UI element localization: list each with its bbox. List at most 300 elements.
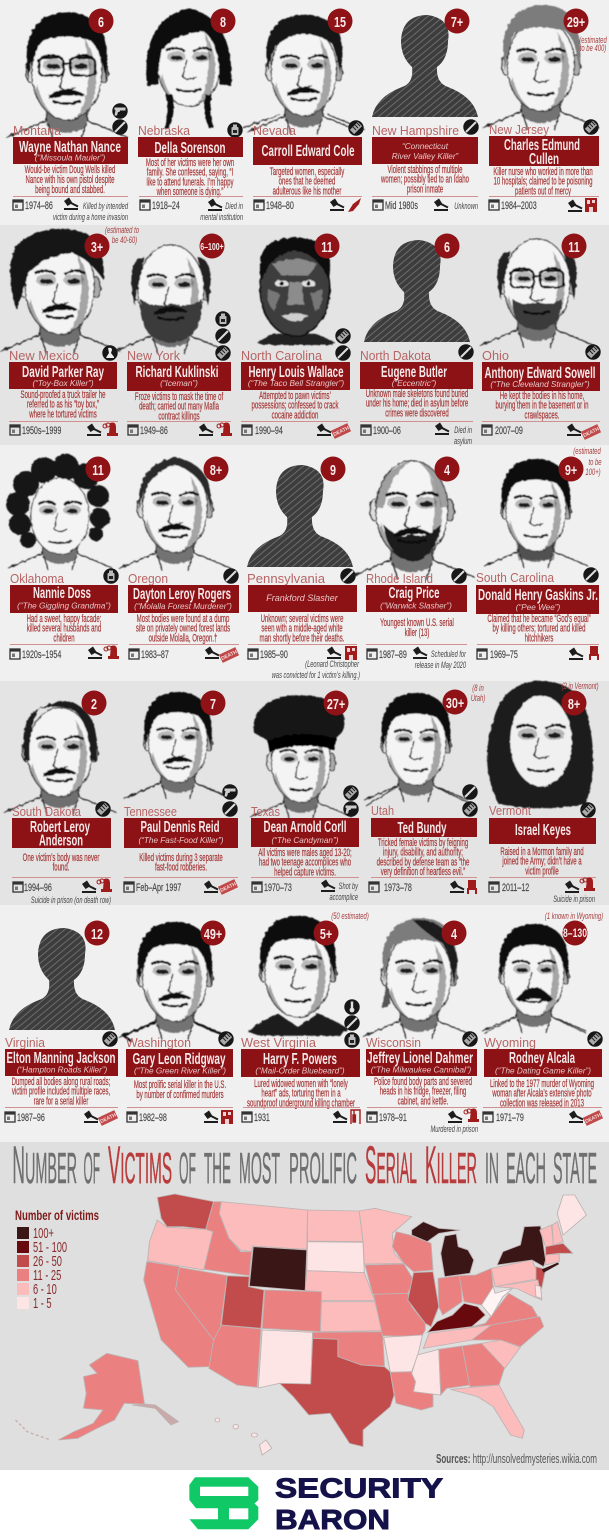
portrait: Carroll Edward Cole	[243, 15, 365, 134]
description: site on privately owned forest lands	[136, 622, 231, 634]
date: 1920s–1954	[22, 649, 61, 660]
date: 1971–79	[496, 1112, 524, 1123]
date: 2011–12	[502, 882, 529, 893]
victim count badge: 5+	[320, 925, 332, 942]
method icons	[343, 785, 359, 817]
name bar: (“Mail-Order Bluebeard”)	[255, 1066, 345, 1076]
victim count badge	[442, 920, 466, 946]
victim count badge	[200, 234, 224, 258]
method icon	[102, 1031, 118, 1047]
victim count badge	[564, 8, 588, 34]
state name: New Jersey	[489, 122, 549, 137]
victim count badge: 6–100+	[200, 241, 224, 252]
description: where he tortured victims	[29, 407, 97, 420]
date	[13, 200, 53, 211]
description: prison inmate	[407, 182, 443, 195]
silhouette	[9, 928, 115, 1030]
victim count badge	[314, 234, 340, 258]
date: 1948–80	[266, 200, 294, 211]
description: when someone is dying.”	[156, 185, 223, 198]
description: Would-be victim Doug Wells killed	[25, 163, 115, 175]
state name: Virginia	[5, 1035, 46, 1050]
name bar: (“The Cleveland Strangler”)	[490, 380, 590, 389]
name bar	[371, 818, 477, 837]
card: Tennessee	[124, 690, 238, 895]
description: very definition of heartless evil.”	[381, 865, 465, 878]
date: 1973–78	[384, 882, 412, 893]
description: death; carried out many Mafia	[139, 400, 219, 412]
victim count badge	[84, 920, 110, 946]
card: South Carolina	[476, 446, 602, 660]
map title: PROLIFIC	[289, 1144, 357, 1193]
name bar	[241, 1049, 360, 1077]
date: 1983–87	[141, 649, 169, 660]
legend: 26 - 50	[33, 1253, 62, 1270]
estimate note: (estimated to	[105, 225, 139, 235]
name bar: David Parker Ray	[22, 364, 104, 381]
victim count badge	[328, 8, 352, 34]
description: crawlspaces.	[525, 408, 559, 421]
name bar	[484, 1049, 602, 1077]
date: 1900–06	[373, 425, 401, 436]
map title: IN	[485, 1144, 499, 1193]
date: 1987–96	[17, 1112, 45, 1123]
date: 1978–91	[379, 1112, 407, 1123]
card: Ohio	[480, 234, 601, 440]
outcome	[553, 878, 595, 904]
sources: Sources: http://unsolvedmysteries.wikia.com	[436, 1452, 597, 1467]
name bar: Ted Bundy	[398, 820, 447, 837]
outcome icons	[567, 424, 601, 440]
date: Mid 1980s	[385, 200, 418, 211]
estimate note: (estimated	[573, 446, 601, 456]
map title: VICTIMS	[108, 1136, 172, 1195]
description: He kept the bodies in his home,	[500, 389, 584, 401]
state name: New Hampshire	[372, 123, 459, 138]
portrait: Nannie Doss	[6, 454, 112, 570]
outcome icons	[569, 646, 599, 660]
name bar: (“The Taco Bell Strangler”)	[248, 379, 344, 388]
description: Killer nurse who worked in more than	[493, 165, 593, 177]
method icon	[580, 802, 596, 818]
method icon	[103, 568, 119, 584]
estimate note: be 40-60)	[112, 235, 137, 245]
state name: Wisconsin	[366, 1035, 421, 1050]
portrait: Dayton Leroy Rogers	[119, 457, 231, 571]
state name: Montana	[13, 123, 62, 138]
estimate note: Utah)	[471, 693, 485, 703]
description: injury, disability, and authority;	[383, 846, 463, 858]
outcome	[272, 646, 360, 680]
portrait: Robert Leroy Anderson	[4, 701, 116, 815]
description: victim profile	[525, 864, 559, 877]
name bar: Della Sorenson	[154, 140, 226, 157]
description: hitchhikers	[525, 631, 554, 644]
card: New Mexico	[0, 225, 139, 436]
description: soundproof underground killing chamber	[247, 1096, 355, 1109]
description: Tricked female victims by feigning	[378, 836, 468, 848]
victim count badge: 11	[321, 238, 333, 255]
method icon	[451, 568, 467, 584]
victim count badge: 11	[92, 461, 104, 478]
name bar: (“Molalla Forest Murderer”)	[134, 602, 232, 611]
outcome icons	[84, 1110, 118, 1126]
name bar	[126, 1049, 233, 1077]
state name: Oklahoma	[10, 571, 65, 586]
victim count badge: 6	[444, 238, 450, 255]
date: 1987–89	[379, 649, 407, 660]
name bar	[251, 818, 359, 847]
outcome icons: DEATH	[582, 426, 601, 439]
name bar: Frankford Slasher	[266, 593, 339, 603]
description: rare for a serial killer	[34, 1094, 88, 1107]
date: 1931	[254, 1112, 270, 1123]
description: heads in his fridge, freezer, filing	[380, 1085, 466, 1097]
estimate note: (50 estimated)	[331, 911, 369, 921]
description: contract killings	[158, 409, 200, 422]
portrait: Della Sorenson	[146, 8, 231, 128]
state name: Vermont	[489, 803, 531, 818]
description: man shortly before their deaths.	[260, 631, 344, 644]
state name: Rhode Island	[366, 571, 433, 586]
outcome: Murdered in prison	[431, 1124, 478, 1134]
outcome: asylum	[454, 436, 472, 446]
legend: 6 - 10	[33, 1281, 57, 1298]
date	[367, 649, 407, 660]
logo mark	[188, 1477, 258, 1529]
state name: North Carolina	[241, 348, 323, 363]
victim count badge	[320, 456, 346, 482]
name bar	[489, 136, 599, 168]
card: South Dakota	[4, 690, 116, 905]
date: 1969–75	[490, 649, 518, 660]
estimate note: (2 in Vermont)	[561, 681, 599, 691]
outcome icons	[450, 880, 477, 894]
description: Most of her victims were her own	[146, 156, 234, 168]
date	[127, 1112, 167, 1123]
victim count badge: 8–130	[563, 928, 587, 940]
name bar: Gary Leon Ridgway	[132, 1051, 226, 1068]
description: Most bodies were found at a dump	[137, 612, 229, 624]
victim count badge	[562, 920, 588, 946]
outcome	[413, 646, 466, 670]
map title: KILLER	[425, 1136, 477, 1195]
name bar: (“The Green River Killer”)	[134, 1066, 226, 1076]
description: Linked to the 1977 murder of Wyoming	[490, 1077, 594, 1089]
method icon	[218, 1031, 234, 1047]
description: Violent stabbings of multiple	[387, 163, 463, 175]
name bar: Richard Kuklinski	[136, 364, 218, 381]
outcome icons	[333, 1110, 360, 1124]
state name: Tennessee	[124, 804, 177, 819]
state name: West Virginia	[241, 1035, 317, 1050]
outcome: (Leonard Christopher	[305, 659, 359, 669]
name bar: Dayton Leroy Rogers	[133, 586, 231, 603]
state name: Nebraska	[138, 123, 191, 138]
card: New York	[114, 234, 232, 436]
description: Sound-proofed a truck trailer he	[21, 388, 106, 400]
method icon	[583, 119, 599, 135]
description: heart” ads, torturing them in a	[261, 1087, 341, 1099]
victim count badge	[434, 456, 460, 482]
outcome: Shot by	[339, 881, 359, 891]
map title: SERIAL	[365, 1136, 417, 1195]
name bar: (“Missoula Mauler”)	[35, 154, 106, 162]
name bar: (“The Candyman”)	[272, 836, 339, 845]
description: fast-food robberies.	[155, 861, 207, 873]
outcome icons	[204, 1110, 233, 1124]
portrait: Richard Kuklinski	[114, 245, 228, 354]
description: Had a sweet, happy facade;	[27, 612, 101, 624]
description: had two teenage accomplices who	[259, 856, 351, 868]
estimate note: (8 in	[472, 683, 484, 693]
outcome icons: DEATH	[584, 1112, 603, 1125]
name bar: (“The Giggling Grandma”)	[17, 602, 111, 610]
state name: Pennsylvania	[247, 571, 326, 586]
card: Texas	[250, 690, 359, 902]
outcome icons: DEATH	[99, 1112, 118, 1125]
victim count badge	[434, 234, 460, 258]
description: women; possibly tied to an Idaho	[380, 173, 469, 185]
name bar: Dean Arnold Corll	[264, 819, 346, 836]
name bar: Carroll Edward Cole	[262, 143, 355, 160]
name bar	[13, 137, 128, 164]
date: 1984–2003	[501, 200, 537, 211]
description: family. She confessed, saying, “I	[147, 166, 233, 178]
choropleth map of US states	[16, 1194, 586, 1455]
name bar	[138, 137, 243, 157]
outcome	[435, 422, 472, 446]
name bar: (“Pee Wee”)	[516, 603, 560, 612]
estimate note	[573, 446, 602, 477]
outcome: Died in	[225, 201, 243, 211]
name bar	[5, 1049, 118, 1076]
description: like to attend funerals. I’m happy	[147, 175, 234, 188]
outcome icons: DEATH	[219, 881, 238, 894]
portrait: Wayne Nathan Nance	[6, 12, 128, 140]
description: Unknown male skeletons found buried	[366, 387, 468, 399]
description: possessions; confessed to crack	[252, 399, 339, 411]
name bar: (“The Dating Game Killer”)	[495, 1066, 591, 1076]
victim count badge	[84, 234, 110, 258]
name bar	[489, 818, 596, 844]
method icon	[462, 1031, 478, 1047]
description: crimes were discovered	[385, 406, 449, 419]
name bar	[10, 585, 118, 613]
date	[242, 1112, 270, 1123]
victim count badge	[210, 8, 236, 34]
description: Youngest known U.S. serial	[380, 616, 454, 628]
description: helped capture victims.	[274, 865, 336, 878]
card: West Virginia	[241, 911, 369, 1124]
date	[242, 425, 283, 436]
name bar: (“Hampton Roads Killer”)	[17, 1066, 108, 1074]
card: Rhode Island	[350, 456, 474, 670]
description: 10 hospitals; claimed to be poisoning	[493, 175, 593, 187]
description: Police found body parts and severed	[374, 1075, 472, 1087]
name bar: Israel Keyes	[515, 822, 571, 839]
portrait: Donald Henry Gaskins Jr.	[484, 459, 588, 568]
method icon	[95, 801, 111, 817]
date: 1985–90	[260, 649, 288, 660]
method icon	[223, 568, 239, 584]
victim count badge: 2	[91, 695, 97, 712]
portrait: Craig Price	[350, 461, 474, 580]
method icons	[335, 328, 351, 361]
victim count badge	[562, 234, 586, 258]
outcome icons	[330, 198, 361, 212]
outcome icons	[199, 422, 232, 436]
description: victim profile included multiple races,	[12, 1085, 110, 1097]
victim count badge: 4	[444, 461, 451, 478]
legend: 1 - 5	[33, 1295, 52, 1312]
legend: 100+	[33, 1225, 54, 1242]
date	[129, 649, 169, 660]
state name: Ohio	[482, 348, 509, 363]
victim count badge	[200, 690, 226, 716]
method icon	[587, 1031, 603, 1047]
description: found.	[53, 861, 69, 873]
name bar	[253, 137, 362, 165]
name bar: (“The Milwaukee Cannibal”)	[371, 1066, 472, 1074]
logo: Security Baron	[188, 1472, 443, 1535]
portrait: Ted Bundy	[364, 693, 471, 806]
date: Feb–Apr 1997	[136, 882, 181, 893]
description: joined the Army; didn’t have a	[502, 855, 582, 867]
name bar: “Connecticut	[402, 142, 449, 151]
name bar: (“The Fast-Food Killer”)	[138, 836, 224, 845]
outcome: was convicted for 1 victim’s killing.)	[272, 670, 360, 680]
method icons	[344, 999, 360, 1048]
card: North Carolina	[241, 234, 351, 439]
description: under his home; died in asylum before	[366, 397, 468, 409]
date	[367, 1112, 407, 1123]
outcome icons	[88, 646, 119, 659]
card: Nevada	[243, 8, 365, 212]
estimate note: (1 known in Wyoming)	[545, 911, 603, 921]
victim count badge	[562, 690, 586, 716]
victim count badge: 9+	[565, 461, 577, 478]
description: Most prolific serial killer in the U.S.	[134, 1078, 226, 1090]
description: ones that he deemed	[279, 175, 335, 187]
method icon	[340, 568, 356, 584]
name bar	[366, 585, 467, 612]
outcome icons: DEATH	[220, 649, 239, 662]
description: being bound and stabbed.	[35, 183, 105, 195]
date	[254, 200, 294, 211]
description: Dumped all bodies along rural roads;	[12, 1075, 110, 1087]
name bar: Harry F. Powers	[263, 1051, 337, 1068]
map title: OF	[179, 1144, 196, 1193]
victim count badge: 6	[98, 13, 104, 30]
name bar: Paul Dennis Reid	[140, 819, 220, 836]
name bar	[241, 362, 350, 390]
wordmark: SECURITY	[275, 1472, 443, 1504]
date: 2007–09	[495, 425, 523, 436]
description: children	[53, 631, 75, 644]
description: outside Molalla, Oregon.†	[149, 631, 217, 644]
card: Utah	[364, 683, 485, 894]
name bar: Eugene Butler	[381, 364, 447, 381]
description: Claimed that he became “God’s equal”	[487, 612, 591, 624]
map title: NUMBER	[12, 1136, 77, 1195]
date	[489, 882, 529, 893]
state name: New Mexico	[9, 348, 79, 363]
victim count badge: 49+	[204, 925, 222, 942]
description: by number of confirmed murders	[136, 1088, 224, 1100]
outcome: Suicide in prison (on death row)	[31, 895, 111, 905]
card: New Hampshire	[372, 8, 479, 211]
description: cocaine addiction	[272, 408, 318, 421]
description: Lured widowed women with “lonely	[254, 1077, 348, 1089]
date	[140, 200, 180, 211]
name bar: Henry Louis Wallace	[248, 364, 344, 381]
outcome	[31, 878, 112, 905]
name bar: Robert Leroy	[30, 819, 90, 836]
outcome	[200, 198, 243, 222]
map title: MOST	[239, 1144, 280, 1193]
name bar: Wayne Nathan Nance	[19, 139, 121, 156]
date: 1950s–1999	[22, 425, 61, 436]
state name: Washington	[126, 1035, 191, 1050]
method icon	[585, 344, 601, 360]
victim count badge	[314, 920, 338, 946]
name bar	[482, 362, 600, 391]
method icon	[458, 344, 474, 360]
description: killed several husbands and	[27, 622, 101, 634]
state name: South Carolina	[476, 570, 555, 585]
description: patients out of mercy	[515, 184, 571, 197]
outcome icons	[205, 646, 239, 663]
name bar: (“Toy-Box Killer”)	[32, 379, 94, 388]
description: Targeted women, especially	[270, 165, 345, 177]
portrait: Gary Leon Ridgway	[119, 922, 231, 1042]
card: Pennsylvania	[247, 456, 360, 680]
date	[252, 882, 292, 893]
estimate note: to be 400)	[580, 43, 607, 53]
outcome: Killed by intended	[83, 201, 128, 211]
silhouette	[247, 465, 353, 567]
description: adulterous like his mother	[273, 184, 341, 197]
legend	[15, 1207, 99, 1312]
name bar: Nannie Doss	[33, 585, 91, 602]
description: Attempted to pawn victims’	[259, 389, 331, 401]
name bar: Jeffrey Lionel Dahmer	[367, 1050, 473, 1067]
method icons	[112, 103, 128, 135]
outcome: accomplice	[330, 892, 358, 902]
victim count badge: 15	[334, 13, 346, 30]
card: Vermont	[487, 681, 599, 904]
date: 1949–86	[140, 425, 168, 436]
method icon	[348, 120, 364, 136]
portrait: Rodney Alcala	[482, 924, 586, 1033]
date: 1990–94	[255, 425, 283, 436]
date: 1982–98	[139, 1112, 167, 1123]
description: collection was released in 2013	[500, 1096, 584, 1109]
name bar: (“Warwick Slasher”)	[380, 602, 452, 610]
estimate note: (estimated	[579, 35, 607, 45]
wordmark: BARON	[275, 1504, 390, 1535]
card: Virginia	[5, 920, 118, 1126]
wordmark	[275, 1472, 443, 1535]
outcome	[321, 880, 359, 902]
outcome icons	[568, 198, 597, 212]
card: North Dakota	[360, 234, 474, 446]
method icons	[215, 311, 231, 361]
victim count badge: 29+	[567, 13, 585, 30]
outcome	[431, 1108, 479, 1134]
name bar: (“Eccentric”)	[392, 379, 437, 388]
